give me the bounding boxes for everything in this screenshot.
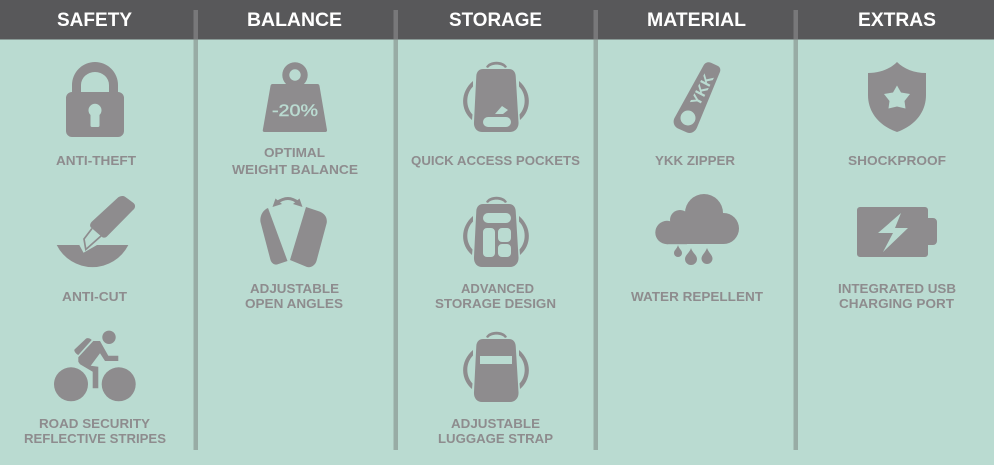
label: optimal: OPTIMAL: [264, 145, 325, 160]
icon: ykk zipper pull: [674, 62, 720, 133]
panel: balance: [232, 10, 358, 311]
label: quick access pockets: QUICK ACCESS POCKETS: [411, 153, 580, 168]
label: open angles: OPEN ANGLES: [245, 296, 343, 311]
icon: weight: [263, 62, 327, 132]
label: shockproof: SHOCKPROOF: [848, 153, 946, 168]
label: anti-cut: ANTI-CUT: [62, 289, 127, 304]
text: ykk: YKK: [687, 72, 718, 109]
label: road security: ROAD SECURITY: [39, 416, 150, 431]
label: weight balance: WEIGHT BALANCE: [232, 162, 358, 177]
label: integrated usb: INTEGRATED USB: [838, 281, 956, 296]
label: water repellent: WATER REPELLENT: [631, 289, 763, 304]
heading: safety: SAFETY: [57, 10, 132, 31]
icon: cyclist with backpack: [54, 331, 136, 401]
icon: battery with bolt: [857, 207, 937, 257]
text: minus twenty percent: -20%: [272, 101, 318, 120]
icon: padlock: [66, 62, 124, 137]
label: reflective stripes: REFLECTIVE STRIPES: [24, 431, 166, 446]
heading: storage: STORAGE: [449, 10, 542, 31]
label: anti-theft: ANTI-THEFT: [56, 153, 136, 168]
panel: storage: [411, 10, 580, 446]
icon: backpack luggage strap: [463, 332, 529, 402]
icon: shield with star: [868, 62, 926, 132]
label: storage design: STORAGE DESIGN: [435, 296, 556, 311]
label: ykk zipper: YKK ZIPPER: [655, 153, 736, 168]
icon: adjustable open angles: [260, 198, 327, 267]
heading: balance: BALANCE: [247, 10, 342, 31]
icon: backpack quick access: [463, 62, 529, 132]
icon: cutter cutting surface: [57, 196, 135, 267]
label: advanced: ADVANCED: [461, 281, 534, 296]
panel: safety: [24, 10, 166, 446]
label: luggage strap: LUGGAGE STRAP: [438, 431, 553, 446]
panel: material: [631, 10, 763, 304]
label: adjustable: ADJUSTABLE: [451, 416, 540, 431]
icon: rain cloud: [655, 194, 739, 265]
icon: backpack advanced storage: [463, 197, 529, 267]
label: adjustable: ADJUSTABLE: [250, 281, 339, 296]
panel: extras: [838, 10, 956, 311]
heading: extras: EXTRAS: [858, 10, 936, 31]
label: charging port: CHARGING PORT: [839, 296, 954, 311]
heading: material: MATERIAL: [647, 10, 746, 31]
header bar: [0, 0, 994, 40]
